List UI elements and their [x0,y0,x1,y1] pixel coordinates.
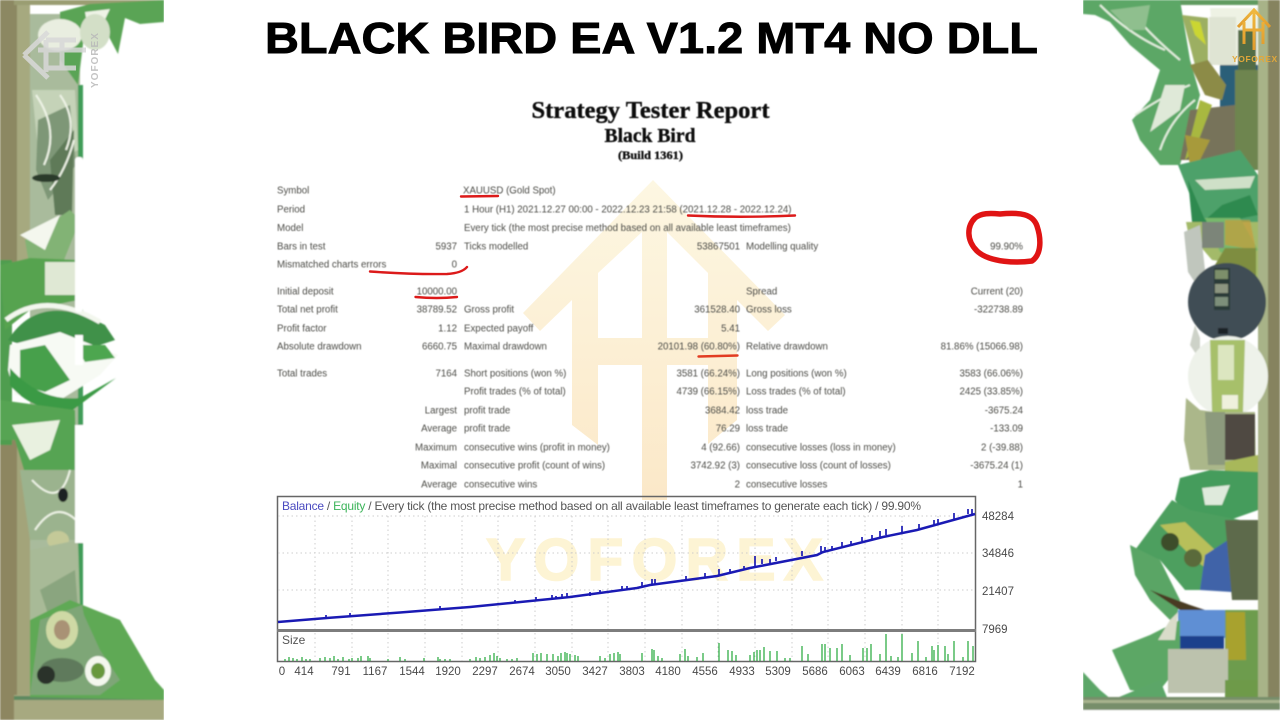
text block: report table: 38789.52 [417,304,457,316]
text block: report table: Maximal [421,460,457,472]
text block: report table: Long positions (won %) [746,368,847,380]
balance curve [278,509,975,622]
text block: report table: consecutive loss (count of losses) [746,460,891,472]
trade axis labels: 6063 [839,666,865,678]
text block: report table: 5.41 [721,324,740,334]
text block: report table: Ticks modelled [464,242,528,252]
text block: report table: 4739 (66.15%) [676,386,740,398]
text block: report table: -3675.24 (1) [970,460,1023,472]
text block: report table: 361528.40 [694,304,741,316]
text block: report table: Total net profit [277,304,338,316]
trade axis labels: 5686 [802,666,828,678]
text block: report table: Modelling quality [746,242,818,252]
trade axis labels: 1920 [435,666,461,678]
text block: report table: Model [277,223,303,234]
text block: report table: loss trade [746,424,788,434]
icon: top right gold YOFOREX logo [1232,10,1278,64]
text block: report table [277,186,1024,490]
size label: Size [282,633,306,647]
text block: report table: Maximum [415,442,457,454]
text block: report table: 3583 (66.06%) [959,368,1023,380]
text block: report table: 2 [735,480,740,490]
trade axis labels [279,666,975,678]
trade axis labels: 2674 [509,666,535,678]
text block: report table: profit trade [464,424,510,434]
title: BLACK BIRD EA V1.2 MT4 NO DLL [265,14,1038,63]
text block: report table: Bars in test [277,242,326,252]
trade axis labels: 3803 [619,666,645,678]
trade axis labels: 6816 [912,666,938,678]
text block: report table: 1 Hour (H1) 2021.12.27 00:00 - 2022.12.23 21:58 (2021.12.28 - 2022.12.24) [464,204,791,216]
text block: report table: Largest [425,406,457,416]
trade axis labels: 2297 [472,666,498,678]
text block: report table: 2425 (33.85%) [959,386,1023,398]
text block: report table: Average [421,424,457,434]
text block: report table: consecutive wins [464,480,537,490]
price axis labels: 48284 [982,511,1015,523]
text block: report table: 4 (92.66) [701,442,740,454]
text block: report table: consecutive losses (loss in money) [746,442,896,454]
text block: report table: Every tick (the most precise method based on all available least timeframes) [464,223,791,234]
text block: report table: 7164 [435,368,458,380]
text block: report table: Symbol [277,186,309,196]
text block: report table: Loss trades (% of total) [746,386,846,398]
icon: top right gold YOFOREX logo: YOFOREX [1232,54,1278,64]
separator between panes [277,629,976,632]
icon: left rotated logo watermark: YOFOREX [90,32,101,88]
chart: balance and volume graph [277,496,1015,678]
text block: report table: Period [277,204,305,216]
panel: right decorative foliage border [1083,0,1280,720]
heading: strategy tester report [532,97,770,162]
text block: report table: consecutive losses [746,480,827,490]
text block: report table: consecutive wins (profit in money) [464,442,610,454]
trade axis labels: 7192 [949,666,975,678]
heading: strategy tester report: Strategy Tester Report [532,97,770,124]
price axis labels: 21407 [982,586,1014,598]
text block: report table: Short positions (won %) [464,368,566,380]
heading: strategy tester report: Black Bird [604,126,696,147]
text block: report table: 1.12 [438,324,457,334]
watermark text: YOFOREX: YOFOREX [486,527,823,593]
trade axis labels: 1167 [363,666,387,678]
text block: report table: 3581 (66.24%) [676,368,740,380]
text block: report table: Profit factor [277,324,327,334]
text block: report table: 10000.00 [417,286,458,298]
trade axis labels: 4180 [655,666,681,678]
text block: report table: 81.86% (15066.98) [941,342,1023,352]
icon: left rotated logo watermark [24,32,101,88]
text block: report table: 1 [1018,480,1023,490]
size bars [285,634,973,661]
trade axis labels: 791 [331,666,351,678]
text block: report table: Absolute drawdown [277,342,362,352]
trade axis labels: 5309 [765,666,791,678]
trade axis labels: 3427 [582,666,608,678]
text block: report table: Average [421,480,457,490]
trade axis labels: 4556 [692,666,718,678]
chart legend line: Balance / Equity / Every tick (the most precise method based on all available least timeframes to generate each tick) / 99.90% [282,499,921,513]
text block: report table: Spread [746,286,777,298]
text block: report table: 5937 [435,242,457,252]
text block: report table: XAUUSD (Gold Spot) [463,186,556,196]
text block: report table: Maximal drawdown [464,342,547,352]
text block: report table: Initial deposit [277,286,334,298]
panel: left decorative foliage border [0,0,164,720]
text block: report table: Expected payoff [464,324,534,334]
text block: report table: -3675.24 [985,406,1024,416]
text block: report table: 6660.75 [422,342,457,352]
trade axis labels: 1544 [399,666,425,678]
text block: report table: 0 [452,260,458,270]
trade axis labels: 4933 [729,666,755,678]
price axis labels [982,511,1015,636]
text block: report table: 76.29 [716,424,740,434]
text block: report table: consecutive profit (count of wins) [464,460,605,472]
text block: report table: 53867501 [697,242,740,252]
trade axis labels: 0 [279,666,285,678]
text block: report table: Current (20) [971,286,1023,298]
text block: report table: 20101.98 (60.80%) [658,342,740,352]
text block: report table: profit trade [464,406,510,416]
main white report panel [164,0,1083,720]
text block: report table: -322738.89 [974,304,1023,316]
text block: report table: loss trade [746,406,788,416]
text block: report table: Relative drawdown [746,342,828,352]
chart frame [278,496,976,662]
trade axis labels: 414 [294,666,314,678]
text block: report table: 3684.42 [705,406,740,416]
text block: report table: Profit trades (% of total) [464,386,566,398]
icon: gold house watermark [523,180,785,500]
text block: report table: 99.90% [990,242,1023,252]
text block: report table: Total trades [277,368,327,380]
trade axis labels: 3050 [545,666,571,678]
trade axis labels: 6439 [875,666,901,678]
text block: report table: Gross profit [464,304,514,316]
price axis labels: 34846 [982,548,1014,560]
text block: report table: Mismatched charts errors [277,260,386,270]
text block: report table: -133.09 [990,424,1023,434]
heading: strategy tester report: (Build 1361) [618,150,683,162]
text block: report table: Gross loss [746,304,792,316]
text block: report table: 2 (-39.88) [981,442,1023,454]
price axis labels: 7969 [982,624,1008,636]
text block: report table: 3742.92 (3) [690,460,740,472]
red hand-drawn highlights [370,196,1040,356]
